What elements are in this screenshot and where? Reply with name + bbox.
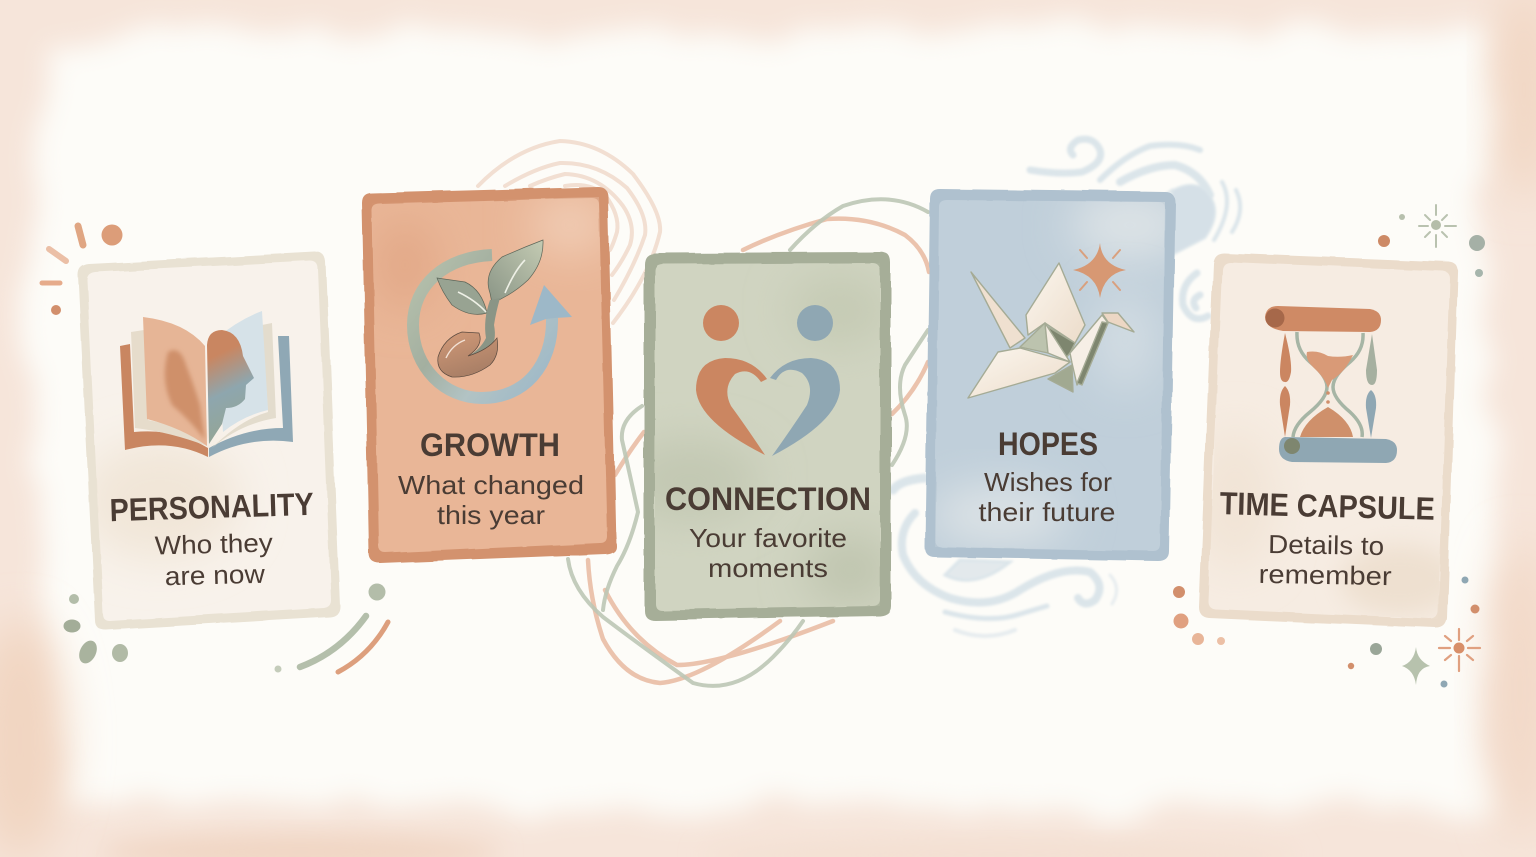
panel: time capsule card xyxy=(1195,253,1460,628)
description: remember xyxy=(1258,559,1392,591)
icon: hourglass with scrolls xyxy=(1265,306,1397,463)
panel: personality card xyxy=(78,252,340,630)
icon: two figures forming a heart xyxy=(696,305,840,456)
peach ribbon xyxy=(588,219,929,683)
panel: connection card xyxy=(620,252,895,620)
card surface xyxy=(362,187,616,563)
icon: origami crane xyxy=(968,263,1134,398)
connecting ribbons around connection card xyxy=(568,199,929,686)
card surface xyxy=(1199,253,1458,628)
card surface xyxy=(78,252,340,630)
description: What changed xyxy=(398,470,584,500)
description xyxy=(1258,529,1392,591)
description xyxy=(978,467,1116,527)
heading: CONNECTION xyxy=(665,481,871,517)
panel: growth card xyxy=(362,187,616,563)
sage ribbon xyxy=(568,199,928,686)
decorative marks: top left xyxy=(42,224,122,315)
heading: HOPES xyxy=(998,426,1098,462)
description xyxy=(154,527,273,591)
card surface xyxy=(925,189,1175,561)
description xyxy=(398,470,584,530)
description: Your favorite xyxy=(689,523,847,553)
peach contour lines behind growth card xyxy=(478,141,660,323)
description: Who they xyxy=(154,527,273,561)
icon: open book with profile xyxy=(120,311,293,457)
decorative marks: top right xyxy=(1378,205,1485,277)
decorative marks: bottom right xyxy=(1173,576,1480,688)
blue swirls behind hopes card xyxy=(893,139,1240,636)
description: their future xyxy=(978,497,1116,527)
decorative marks: bottom left xyxy=(64,584,388,672)
description: Wishes for xyxy=(984,467,1112,497)
icon: four-point star xyxy=(1073,243,1126,298)
description xyxy=(689,523,847,583)
description: this year xyxy=(437,500,545,530)
heading: PERSONALITY xyxy=(109,486,314,528)
heading: TIME CAPSULE xyxy=(1219,485,1435,527)
description: Details to xyxy=(1268,529,1384,561)
icon: seedling in growth arrow xyxy=(413,240,572,398)
panel: hopes card xyxy=(925,189,1190,561)
description: are now xyxy=(164,559,265,591)
card surface xyxy=(644,252,891,620)
heading: GROWTH xyxy=(420,427,560,463)
description: moments xyxy=(708,553,828,583)
